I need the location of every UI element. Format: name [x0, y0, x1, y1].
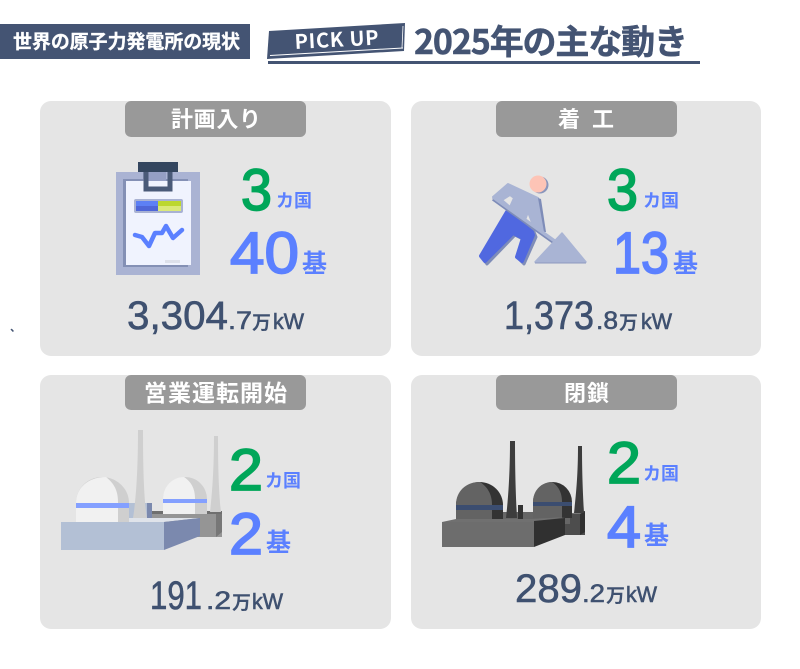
stat: 2基: 基	[266, 523, 291, 559]
stat: output: 万	[606, 581, 625, 608]
tab: 営業運転開始: 営業運転開始	[144, 374, 287, 408]
stat: output: kW	[641, 309, 672, 334]
heading: pick up	[267, 15, 700, 64]
stat: output: kW	[273, 309, 304, 334]
stat: output: 191	[150, 574, 202, 618]
stat: output: .8	[596, 307, 618, 335]
stat: 3カ国: カ国	[276, 187, 312, 213]
stat: output: 万	[252, 308, 271, 335]
stat: 2基	[229, 502, 291, 567]
stat: output: .7	[228, 307, 252, 335]
stat: output	[127, 294, 304, 338]
stat: output: 万	[619, 308, 638, 335]
stat: 40基: 40	[230, 221, 299, 286]
icon: closed nuclear plant	[442, 441, 585, 547]
stat: 2カ国	[607, 431, 679, 496]
stat: 2カ国: カ国	[265, 467, 301, 493]
stat: output: .2	[206, 587, 231, 615]
stat: 40基: 基	[302, 244, 327, 280]
stat: output: 289	[515, 567, 582, 611]
stat: 3カ国	[241, 158, 312, 223]
stat: output: 万	[232, 588, 251, 615]
stat: 13基: 基	[673, 244, 698, 280]
stat: output	[504, 294, 672, 338]
panel: 着工	[411, 101, 761, 356]
heading: pick up: 2025年の主な動き	[414, 15, 688, 64]
stat: 2カ国: 2	[607, 431, 641, 496]
stat: 3カ国: カ国	[643, 187, 679, 213]
icon: operating nuclear plant	[61, 430, 222, 550]
stat: output: 3,304	[127, 294, 228, 338]
page label: 世界の原子力発電所の現状	[13, 27, 240, 54]
tab: 着工	[496, 101, 677, 137]
panel: 閉鎖	[411, 375, 761, 629]
stat: 4基: 4	[607, 495, 641, 560]
stat: 2カ国: カ国	[643, 460, 679, 486]
stat: 2カ国: 2	[229, 438, 263, 503]
stat: 13基: 13	[613, 221, 669, 286]
stat: output	[150, 574, 283, 618]
stat: output	[515, 567, 657, 611]
stat: 3カ国	[607, 158, 679, 223]
stat: 3カ国: 3	[607, 158, 638, 223]
stat: 2カ国	[229, 438, 301, 503]
panel: 計画入り	[40, 101, 391, 356]
stat: output: .2	[582, 580, 605, 608]
tab: 計画入り	[125, 101, 306, 137]
stat: 3カ国: 3	[241, 158, 272, 223]
tab: 計画入り: 計画入り	[171, 102, 261, 134]
stat: 4基	[607, 495, 669, 560]
tab: 着工: 着 工	[558, 102, 614, 134]
heading: pick up: PICK UP	[294, 22, 379, 55]
stat: output: kW	[252, 589, 283, 614]
stray mark: 、	[10, 319, 21, 335]
icon: clipboard	[116, 162, 200, 275]
stat: 4基: 基	[644, 516, 669, 552]
stat: 2基: 2	[229, 502, 263, 567]
icon: worker with shovel	[481, 176, 586, 264]
tab: 閉鎖: 閉鎖	[564, 376, 609, 408]
stat: output: kW	[626, 582, 657, 607]
stat: 40基	[230, 221, 327, 286]
tab: 閉鎖	[496, 375, 677, 410]
stat: output: 1,373	[504, 294, 594, 338]
panel: 営業運転開始	[40, 374, 391, 629]
